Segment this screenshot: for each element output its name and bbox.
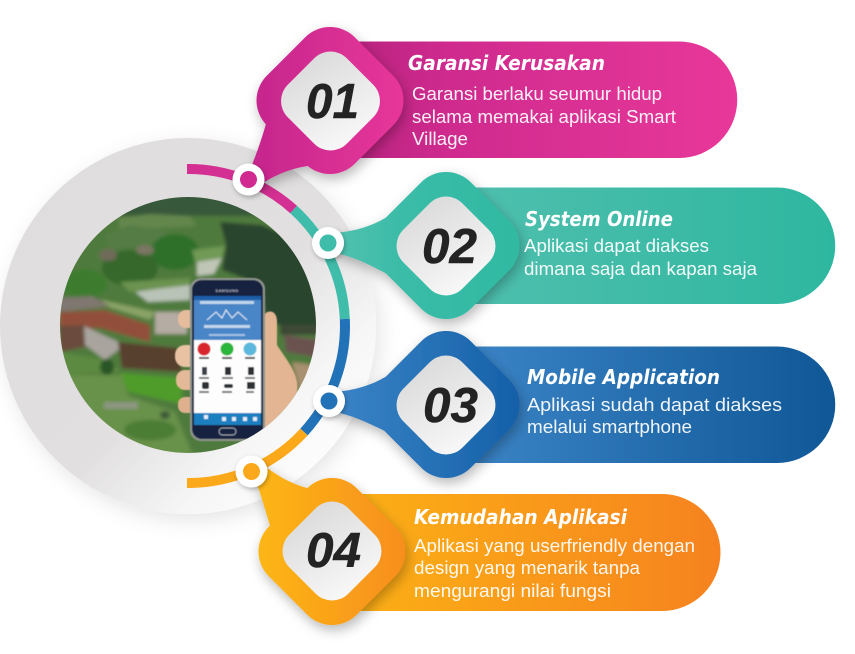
phone: SAMSUNG — [215, 288, 239, 293]
connector node 04 — [236, 456, 268, 488]
body 02 — [524, 236, 758, 279]
badge 04 with tail — [255, 464, 406, 625]
connector node 01 — [232, 164, 264, 196]
heading 01: Garansi Kerusakan — [408, 51, 605, 75]
body 01: selama memakai aplikasi Smart — [412, 107, 676, 127]
body 02: Aplikasi dapat diakses — [524, 236, 709, 256]
landscape — [60, 197, 316, 453]
body 02: dimana saja dan kapan saja — [524, 259, 758, 279]
inner diamond 01 — [281, 52, 380, 150]
body 01: Village — [412, 129, 468, 149]
body 03: melalui smartphone — [527, 417, 692, 437]
body 03: Aplikasi sudah dapat diakses — [527, 395, 782, 415]
body 03 — [527, 395, 782, 437]
pill 02 — [465, 188, 835, 304]
panel: 04 Kemudahan Aplikasi — [255, 464, 721, 625]
photo: village landscape with phone in hand — [60, 197, 316, 453]
body 01 — [412, 84, 676, 149]
inner diamond 03 — [397, 356, 495, 454]
badge 02 with tail — [335, 172, 520, 319]
body 04: Aplikasi yang userfriendly dengan — [414, 536, 695, 556]
hand — [175, 310, 297, 440]
connector node 02 — [312, 227, 344, 259]
badge 03 with tail — [335, 331, 520, 478]
connector node 03 — [313, 385, 345, 417]
inner diamond 04 — [283, 502, 381, 600]
number 03: 03 — [423, 379, 478, 433]
pill 03 — [465, 346, 835, 463]
body 04: mengurangi nilai fungsi — [414, 581, 611, 601]
panel: 02 System Online — [335, 172, 835, 319]
heading 02: System Online — [525, 207, 673, 231]
background disc — [0, 138, 376, 514]
phone — [190, 278, 265, 441]
body 04 — [414, 536, 695, 601]
heading 04: Kemudahan Aplikasi — [414, 505, 628, 529]
body 01: Garansi berlaku seumur hidup — [412, 84, 662, 104]
segmented ring arc — [187, 169, 345, 483]
number 04: 04 — [306, 524, 361, 578]
number 01: 01 — [306, 75, 359, 129]
panel: 03 Mobile Application — [335, 331, 835, 478]
badge 01 with tail — [250, 27, 404, 186]
pill 04 — [350, 494, 721, 611]
panel: 01 Garansi Kerusakan — [250, 27, 737, 186]
pill 01 — [350, 42, 737, 158]
inner diamond 02 — [397, 197, 495, 295]
body 04: design yang menarik tanpa — [414, 558, 641, 578]
heading 03: Mobile Application — [527, 365, 720, 389]
number 02: 02 — [422, 220, 477, 274]
